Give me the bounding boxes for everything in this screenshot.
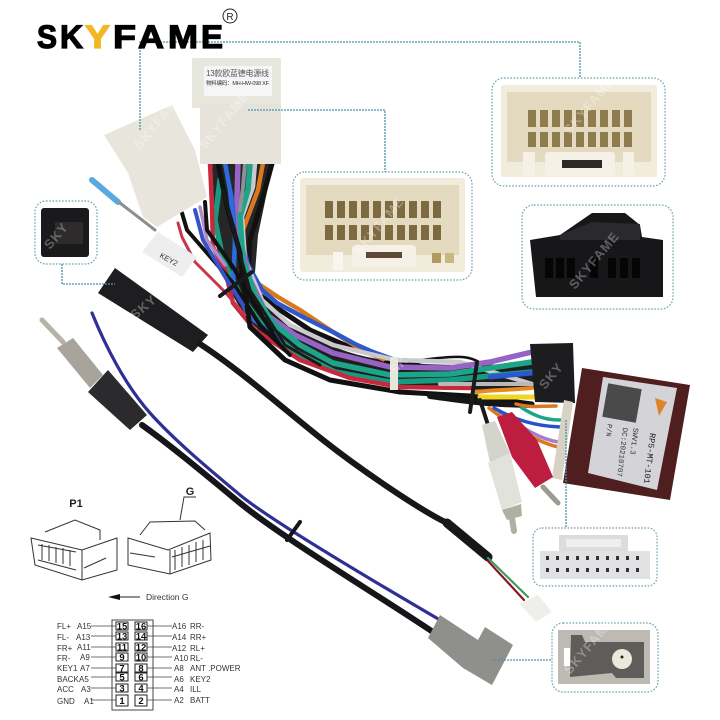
pinout diagram: RL-	[190, 654, 203, 663]
pinout diagram: 7	[119, 664, 125, 674]
callout box: white 20-pin connector	[533, 528, 657, 586]
callout lines	[62, 42, 580, 660]
pinout diagram: FR+	[57, 644, 73, 653]
control module: RP5-MT-101	[641, 432, 657, 484]
pinout diagram: A1	[84, 697, 94, 706]
pinout diagram: 12	[136, 642, 146, 654]
pinout diagram: 6	[138, 672, 144, 684]
cable ties	[220, 272, 477, 412]
logo: SKYFAME: K	[60, 19, 83, 55]
watermarks: SKYFAME	[566, 229, 622, 292]
pinout diagram: A8	[174, 664, 184, 673]
pinout diagram: 11	[117, 642, 128, 654]
pinout diagram: GND	[57, 697, 75, 706]
pinout diagram: KEY2	[190, 675, 211, 684]
KEY2 tag: KEY2	[158, 251, 179, 268]
pinout diagram: 10	[136, 652, 146, 664]
control module	[552, 368, 690, 500]
watermarks: SKYFAME	[387, 317, 447, 377]
top white connector with label	[192, 58, 281, 164]
left white connector	[104, 105, 207, 227]
pinout diagram: A12	[172, 644, 187, 653]
black socket boot	[98, 268, 488, 557]
pinout diagram: ILL	[190, 685, 202, 694]
pinout diagram: A11	[77, 643, 91, 652]
watermarks	[41, 74, 622, 677]
logo: SKYFAME: F	[113, 19, 136, 55]
control module: P/N	[603, 423, 613, 437]
pinout diagram: 9	[119, 652, 125, 664]
watermarks: SKYFAME	[561, 614, 617, 677]
pinout diagram: 2	[138, 696, 144, 707]
G connector drawing	[128, 486, 211, 574]
watermarks: SKYFAME	[561, 74, 617, 137]
module output wires	[480, 400, 560, 447]
watermarks: SKYFAME	[196, 89, 252, 152]
callout box: top right connector	[492, 78, 665, 186]
RCA plugs	[482, 412, 558, 531]
direction G arrow	[108, 592, 189, 602]
P1 connector drawing: P1	[69, 498, 83, 510]
pinout diagram: A10	[174, 654, 189, 663]
watermarks: SKYFAME	[351, 194, 407, 257]
pinout diagram: A4	[174, 685, 184, 694]
callout box: gray socket	[552, 623, 658, 692]
pinout diagram: KEY1	[57, 664, 78, 673]
pinout diagram: A6	[174, 675, 184, 684]
gray antenna connector	[428, 615, 513, 685]
pinout diagram: 16	[136, 622, 146, 632]
logo: SKYFAME: M	[168, 19, 198, 55]
pinout diagram: FL+	[57, 622, 71, 631]
watermarks: SKYFAME	[131, 89, 187, 152]
black connector on harness	[530, 343, 575, 403]
callout box: black 16-pin connector	[522, 205, 673, 309]
callout box: antenna socket	[35, 201, 97, 264]
pinout diagram: 5	[119, 672, 125, 684]
antenna plug and cable	[42, 313, 440, 632]
pinout diagram: 14	[136, 632, 147, 642]
logo: SKYFAME: R	[226, 12, 234, 23]
pinout diagram: RL+	[190, 644, 205, 653]
pinout diagram: ANT .POWER	[190, 664, 241, 673]
blue tail wire	[92, 180, 155, 230]
logo: SKYFAME: S	[37, 19, 57, 55]
top white connector with label: 物料编码：MH-HW-098 XF	[206, 79, 270, 87]
pinout diagram: A9	[80, 653, 90, 662]
logo: SKYFAME: Y	[85, 19, 110, 55]
pinout diagram: A3	[81, 685, 91, 694]
pinout diagram: 13	[117, 632, 127, 642]
pinout diagram: 1	[119, 696, 125, 707]
pinout diagram: BATT	[190, 696, 210, 705]
wire bundle main harness	[178, 160, 534, 405]
pinout diagram: FR-	[57, 654, 71, 663]
pinout diagram: A14	[172, 633, 187, 642]
G connector drawing: G	[186, 486, 194, 498]
small connector and leads	[488, 558, 552, 622]
pinout diagram: 15	[117, 622, 128, 632]
pinout diagram: 3	[119, 684, 125, 694]
watermarks: SKY	[127, 292, 160, 322]
logo: SKYFAME	[37, 9, 237, 55]
pinout diagram: RR-	[190, 622, 205, 631]
pinout diagram	[57, 620, 241, 710]
pinout diagram: A2	[174, 696, 184, 705]
watermarks: SKY	[536, 360, 566, 392]
pinout diagram: RR+	[190, 633, 207, 642]
pinout diagram: FL-	[57, 633, 69, 642]
pinout diagram: A16	[172, 622, 187, 631]
pinout diagram: A5	[79, 675, 89, 684]
control module: SWV1.3	[627, 427, 639, 456]
pinout diagram: ACC	[57, 685, 74, 694]
logo: SKYFAME: A	[138, 19, 164, 55]
pinout diagram: A15	[77, 622, 92, 631]
P1 connector drawing	[31, 498, 117, 580]
control module: DC:20210707	[614, 427, 628, 477]
pinout diagram: A13	[76, 633, 91, 642]
direction G arrow: Direction G	[146, 592, 189, 602]
pinout diagram: 8	[138, 664, 144, 674]
top white connector with label: 13款欧蓝德电源线	[206, 68, 269, 78]
pinout diagram: BACK	[57, 675, 79, 684]
pinout diagram: A7	[80, 664, 90, 673]
watermarks: SKY	[41, 220, 71, 252]
callout box: middle connector	[293, 172, 472, 280]
logo: SKYFAME: E	[201, 19, 223, 55]
pinout diagram: 4	[138, 684, 144, 694]
KEY2 tag	[142, 232, 197, 277]
